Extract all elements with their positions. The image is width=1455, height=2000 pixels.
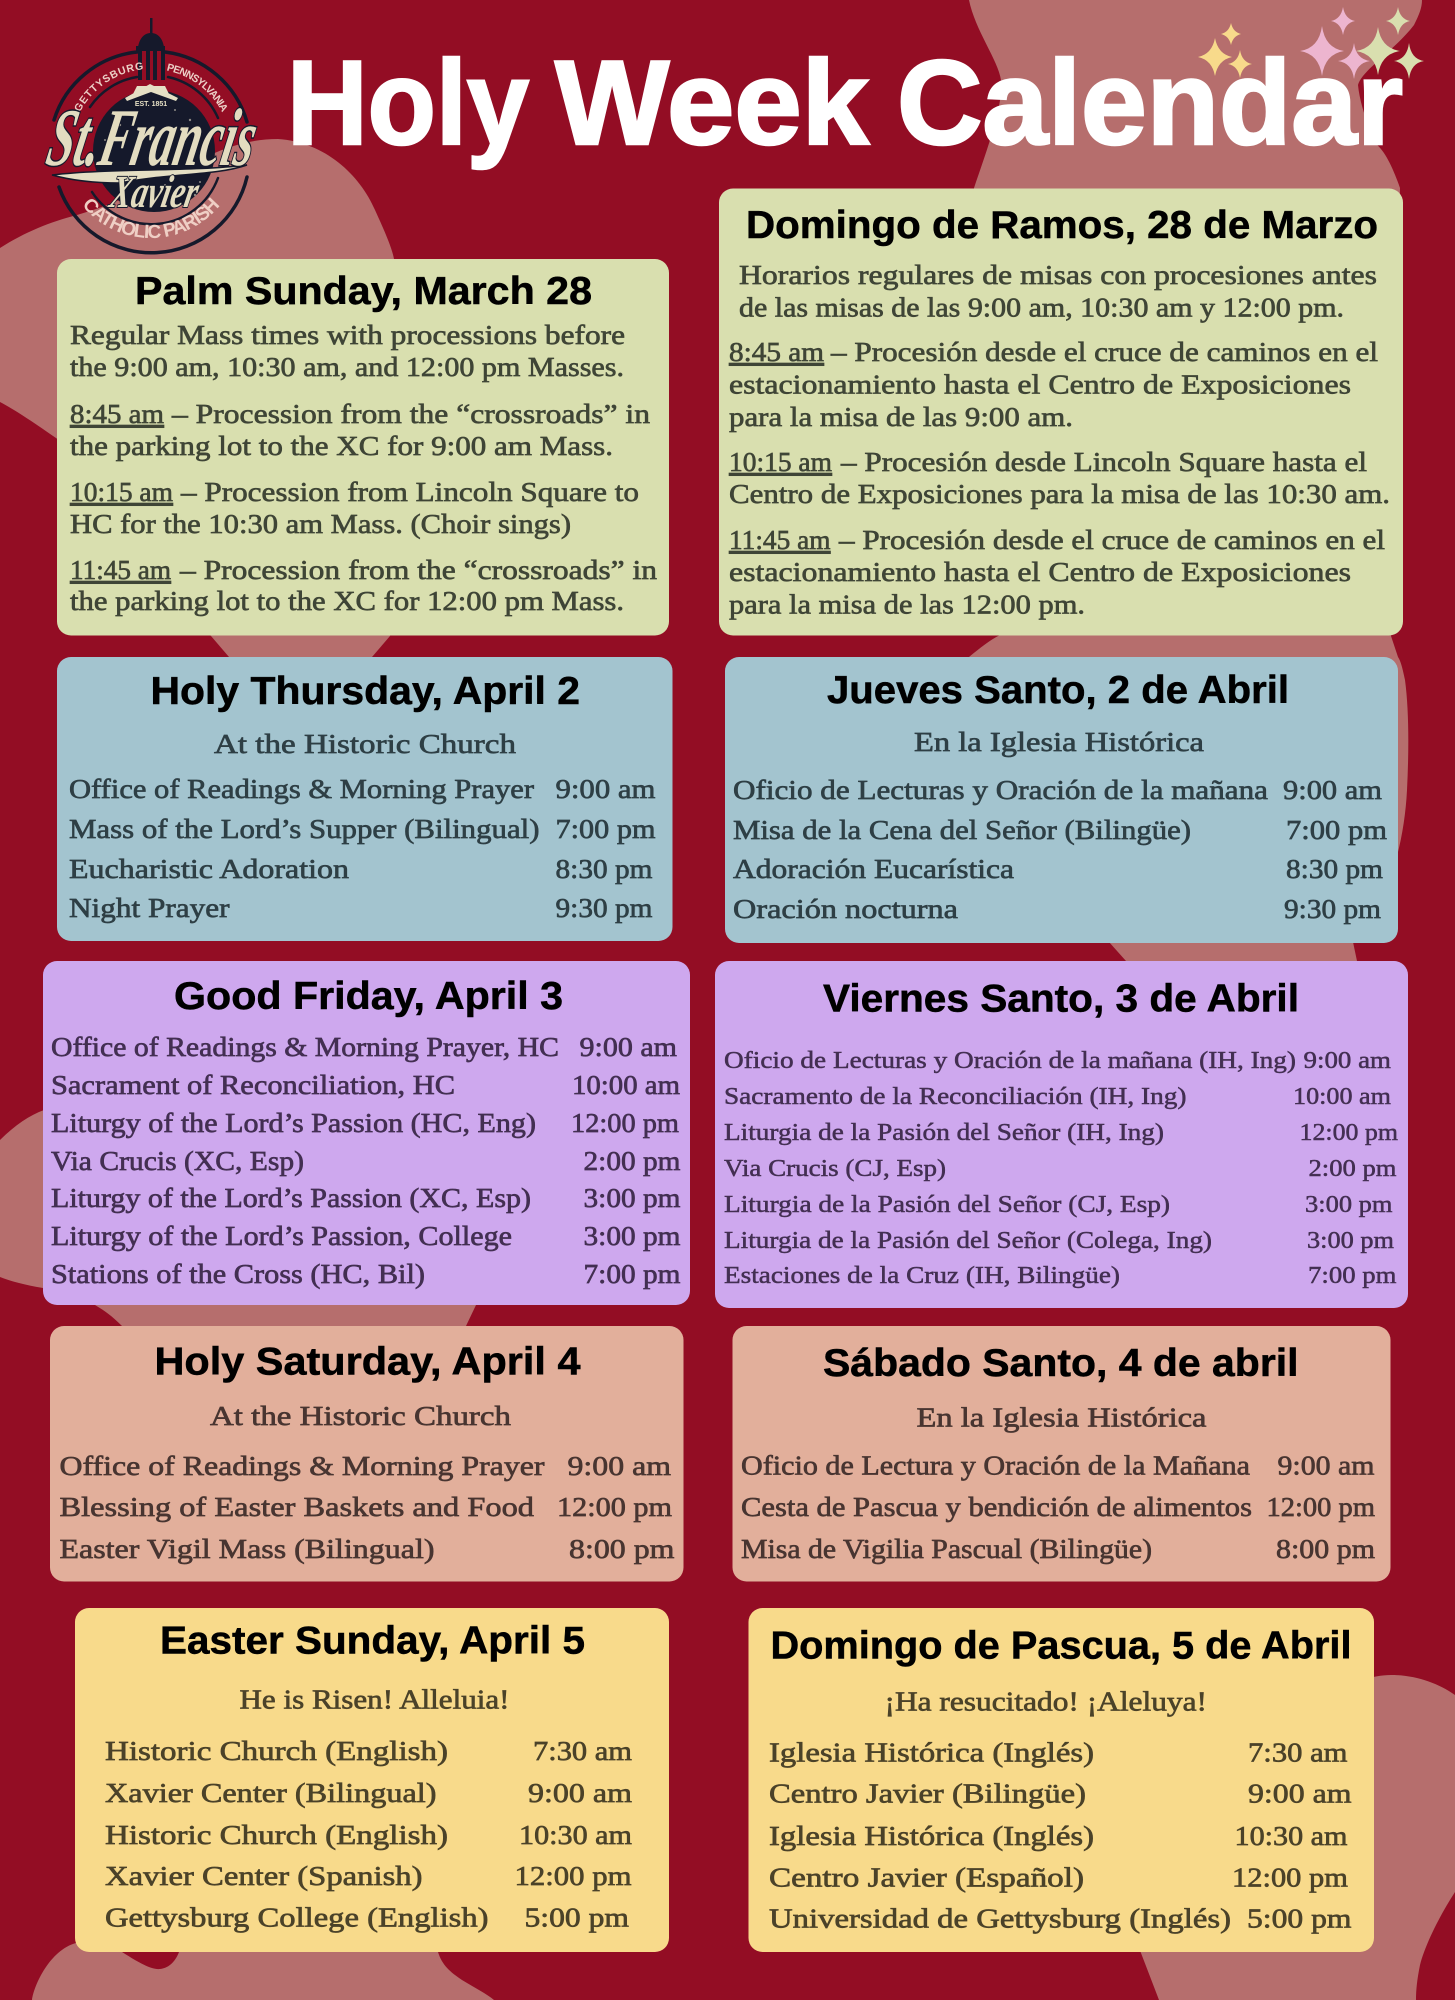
background blob: top left [0,139,395,720]
logo: St. Francis Xavier Catholic Parish: Xavier [104,167,204,218]
schedule row: Misa de la Cena del Señor (Bilingüe) [733,815,1191,845]
schedule row: Liturgy of the Lord’s Passion (XC, Esp) [51,1183,531,1213]
schedule row: 12:00 pm [1300,1120,1398,1146]
logo: St. Francis Xavier Catholic Parish: CATHOLIC PARISH [84,197,220,238]
schedule row: Gettysburg College (English) [105,1902,488,1932]
schedule row: 7:30 am [533,1736,632,1766]
panel: Domingo de Ramos [719,188,1403,636]
schedule row [51,1221,680,1251]
schedule row: 10:00 am [572,1070,680,1100]
text block: 8:45 procesión: para la misa de las 9:00 am. [729,402,1073,432]
schedule row [724,1120,1398,1146]
text block: regular Mass times: the 9:00 am, 10:30 am, and 12:00 pm Masses. [70,352,624,382]
panel: Sábado Santo [732,1326,1390,1582]
schedule row: Iglesia Histórica (Inglés) [769,1821,1094,1851]
schedule row [60,1534,674,1564]
schedule row: 7:30 am [1248,1738,1348,1768]
schedule row: Universidad de Gettysburg (Inglés) [769,1904,1231,1934]
schedule row [741,1534,1375,1564]
text block: 8:45 procession: 8:45 am [70,399,164,429]
text block: 11:45 procesión: 11:45 am [729,525,830,555]
schedule row [769,1862,1348,1892]
text block: 8:45 procesión [729,337,1378,432]
text block: 11:45 procession: – Procession from the “crossroads” in [179,555,658,585]
text block: 10:15 procesión: Centro de Exposiciones para la misa de las 10:30 am. [729,479,1390,509]
panel: Good Friday [43,961,690,1305]
schedule row [51,1070,680,1100]
logo: St. Francis Xavier Catholic Parish: EST. 1851 [135,101,167,108]
schedule row: Office of Readings & Morning Prayer, HC [51,1032,559,1062]
panel: Palm Sunday [57,259,669,636]
logo: St. Francis Xavier Catholic Parish: PENNSYLVANIA [167,64,228,112]
schedule row: Estaciones de la Cruz (IH, Bilingüe) [724,1263,1120,1289]
schedule row: 5:00 pm [1247,1904,1352,1934]
text block: regular Mass times [70,320,625,382]
schedule row: 7:00 pm [1286,815,1387,845]
schedule row [69,854,652,884]
schedule row: Liturgia de la Pasión del Señor (CJ, Esp) [724,1192,1170,1218]
panel: Holy Thursday [57,657,672,941]
schedule row: Blessing of Easter Baskets and Food [60,1492,535,1522]
schedule row: 3:00 pm [584,1183,680,1213]
heading: Domingo de Pascua: Domingo de Pascua, 5 de Abril [770,1624,1352,1668]
text block: regular Mass times: Regular Mass times with processions before [70,320,625,350]
schedule row: 2:00 pm [1308,1156,1397,1182]
title: Week [555,36,869,170]
schedule row [105,1902,629,1932]
schedule row [769,1778,1352,1808]
schedule row: 12:00 pm [1232,1862,1348,1892]
text block: 11:45 procession [70,555,658,616]
schedule row: Liturgy of the Lord’s Passion (HC, Eng) [51,1108,536,1138]
heading: Sábado Santo: Sábado Santo, 4 de abril [823,1342,1298,1385]
text block: 10:15 procesión: – Procesión desde Lincoln Square hasta el [840,447,1367,477]
schedule row [105,1820,632,1850]
schedule row: Cesta de Pascua y bendición de alimentos [741,1492,1252,1522]
schedule row: Eucharistic Adoration [69,854,350,884]
panel: Domingo de Pascua [748,1608,1374,1952]
title: Holy [287,36,529,170]
schedule row: Oración nocturna [733,894,958,924]
heading: Good Friday: Good Friday, April 3 [174,975,563,1018]
text block: 10:15 procession: – Procession from Lincoln Square to [180,477,639,507]
schedule row: Via Crucis (XC, Esp) [51,1146,304,1176]
schedule row: Oficio de Lectura y Oración de la Mañana [741,1450,1250,1480]
schedule row: 9:00 am [1283,775,1382,805]
schedule row: 8:00 pm [1276,1534,1375,1564]
text block: 11:45 procesión: – Procesión desde el cruce de caminos en el [838,525,1385,555]
schedule row: Easter Vigil Mass (Bilingual) [60,1534,434,1564]
panel: Viernes Santo [715,961,1408,1308]
schedule row: 9:00 am [1248,1778,1352,1808]
schedule row: Office of Readings & Morning Prayer [60,1451,544,1481]
subheading: At the Historic Church: At the Historic Church [210,1401,512,1431]
schedule row: 9:00 am [1278,1450,1374,1480]
schedule row [60,1492,672,1522]
schedule row: 7:00 pm [584,1259,680,1289]
text block: 8:45 procession [70,399,651,461]
heading: Domingo de Ramos: Domingo de Ramos, 28 de Marzo [746,204,1378,247]
schedule row [733,815,1387,845]
subheading: En la Iglesia Histórica: En la Iglesia Histórica [916,1402,1207,1432]
heading: Viernes Santo: Viernes Santo, 3 de Abril [823,978,1299,1020]
schedule row: Misa de Vigilia Pascual (Bilingüe) [741,1534,1152,1564]
heading: Jueves Santo: Jueves Santo, 2 de Abril [827,669,1289,712]
text block: horarios regulares: de las misas de las 9:00 am, 10:30 am y 12:00 pm. [739,292,1344,322]
schedule row: 12:00 pm [571,1108,679,1138]
text block: 10:15 procesión [729,447,1390,509]
schedule row: Mass of the Lord’s Supper (Bilingual) [69,814,540,844]
subheading: En la Iglesia Histórica: En la Iglesia Histórica [914,727,1204,757]
text block: 10:15 procesión: 10:15 am [729,447,832,477]
heading: Holy Saturday: Holy Saturday, April 4 [154,1340,581,1384]
schedule row: 12:00 pm [514,1861,632,1891]
schedule row: 9:00 am [556,774,656,804]
schedule row: 3:00 pm [1305,1192,1393,1218]
schedule row: 9:00 am [568,1451,671,1481]
text block: 10:15 procession: HC for the 10:30 am Mass. (Choir sings) [70,509,571,539]
schedule row: Liturgia de la Pasión del Señor (IH, Ing) [724,1120,1164,1146]
schedule row: Adoración Eucarística [733,854,1014,884]
schedule row [724,1228,1394,1254]
schedule row: Xavier Center (Bilingual) [105,1778,436,1808]
background blob: bottom left [32,1943,494,2000]
schedule row: Iglesia Histórica (Inglés) [769,1738,1094,1768]
schedule row: Historic Church (English) [105,1820,448,1850]
schedule row: 9:00 am [1304,1048,1391,1074]
title [287,36,1403,170]
schedule row: 10:00 am [1293,1084,1391,1110]
heading: Easter Sunday: Easter Sunday, April 5 [160,1620,585,1662]
schedule row: 9:00 am [528,1778,632,1808]
schedule row: 2:00 pm [584,1146,680,1176]
schedule row [769,1738,1348,1768]
schedule row [733,894,1381,924]
subheading: Ha resucitado: ¡Ha resucitado! ¡Aleluya! [884,1686,1207,1716]
schedule row: 12:00 pm [557,1492,672,1522]
subheading: At the Historic Church: At the Historic Church [214,729,517,759]
schedule row: 10:30 am [519,1820,632,1850]
schedule row: 12:00 pm [1266,1492,1375,1522]
heading: Palm Sunday: Palm Sunday, March 28 [135,270,592,313]
schedule row [51,1146,680,1176]
subheading: He is Risen: He is Risen! Alleluia! [240,1684,510,1714]
schedule row [769,1821,1348,1851]
schedule row: Stations of the Cross (HC, Bil) [51,1259,425,1289]
schedule row: 8:00 pm [569,1534,674,1564]
schedule row [724,1084,1391,1110]
schedule row [724,1263,1397,1289]
schedule row: 9:00 am [580,1032,677,1062]
schedule row: 10:30 am [1234,1821,1348,1851]
text block: horarios regulares: Horarios regulares de misas con procesiones antes [739,260,1377,290]
schedule row: Sacramento de la Reconciliación (IH, Ing) [724,1084,1186,1110]
schedule row [69,893,652,923]
text block: 11:45 procesión: estacionamiento hasta el Centro de Exposiciones [729,557,1351,587]
schedule row: 9:30 pm [556,893,652,923]
schedule row: Oficio de Lecturas y Oración de la mañana (IH, Ing) [724,1048,1296,1074]
schedule row [724,1192,1393,1218]
text block: 8:45 procesión: 8:45 am [729,337,824,367]
panel: Jueves Santo [725,657,1398,943]
icon: sparkles [1198,7,1424,79]
schedule row: 5:00 pm [524,1902,629,1932]
schedule row: Sacrament of Reconciliation, HC [51,1070,455,1100]
schedule row [51,1183,680,1213]
background blob: top right [969,0,1422,1010]
schedule row: 7:00 pm [1308,1263,1397,1289]
text block: 10:15 procession: 10:15 am [70,477,173,507]
text block: 8:45 procession: – Procession from the “crossroads” in [171,399,651,429]
schedule row: Centro Javier (Español) [769,1862,1084,1892]
schedule row: Office of Readings & Morning Prayer [69,774,534,804]
schedule row [733,854,1383,884]
schedule row [60,1451,671,1481]
panel: Easter Sunday [75,1608,669,1952]
schedule row: 8:30 pm [556,854,652,884]
background blob: middle left [0,1100,500,1420]
logo: St. Francis Xavier Catholic Parish [40,18,266,254]
schedule row [105,1861,632,1891]
schedule row [105,1778,632,1808]
panel: Holy Saturday [50,1326,684,1582]
schedule row: 9:30 pm [1284,894,1381,924]
text block: 11:45 procession: 11:45 am [70,555,171,585]
text block: 8:45 procession: the parking lot to the XC for 9:00 am Mass. [70,431,613,461]
schedule row: 3:00 pm [584,1221,680,1251]
heading: Holy Thursday: Holy Thursday, April 2 [150,670,580,713]
schedule row: Liturgy of the Lord’s Passion, College [51,1221,512,1251]
text block: 11:45 procesión: para la misa de las 12:00 pm. [729,590,1085,620]
schedule row: Historic Church (English) [105,1736,448,1766]
text block: 10:15 procession [70,477,639,539]
schedule row: Oficio de Lecturas y Oración de la mañana [733,775,1268,805]
background blob: bottom right [1136,1675,1455,2000]
schedule row [769,1904,1352,1934]
logo: St. Francis Xavier Catholic Parish: St.Francis [40,92,266,183]
schedule row: Night Prayer [69,893,230,923]
text block: 8:45 procesión: – Procesión desde el cruce de caminos en el [830,337,1378,367]
schedule row [724,1156,1397,1182]
schedule row: Liturgia de la Pasión del Señor (Colega, Ing) [724,1228,1212,1254]
schedule row [51,1108,679,1138]
schedule row: 3:00 pm [1307,1228,1394,1254]
schedule row: Xavier Center (Spanish) [105,1861,422,1891]
schedule row: Via Crucis (CJ, Esp) [724,1156,946,1182]
schedule row: 8:30 pm [1286,854,1383,884]
schedule row: 7:00 pm [556,814,656,844]
logo: St. Francis Xavier Catholic Parish: GETTYSBURG [74,62,143,111]
text block: 8:45 procesión: estacionamiento hasta el Centro de Exposiciones [729,370,1351,400]
text block: 11:45 procesión [729,525,1385,620]
schedule row [51,1259,680,1289]
schedule row [105,1736,632,1766]
title: Calendar [897,36,1403,170]
schedule row: Centro Javier (Bilingüe) [769,1778,1086,1808]
text block: 11:45 procession: the parking lot to the XC for 12:00 pm Mass. [70,586,624,616]
text block: horarios regulares [739,260,1377,322]
